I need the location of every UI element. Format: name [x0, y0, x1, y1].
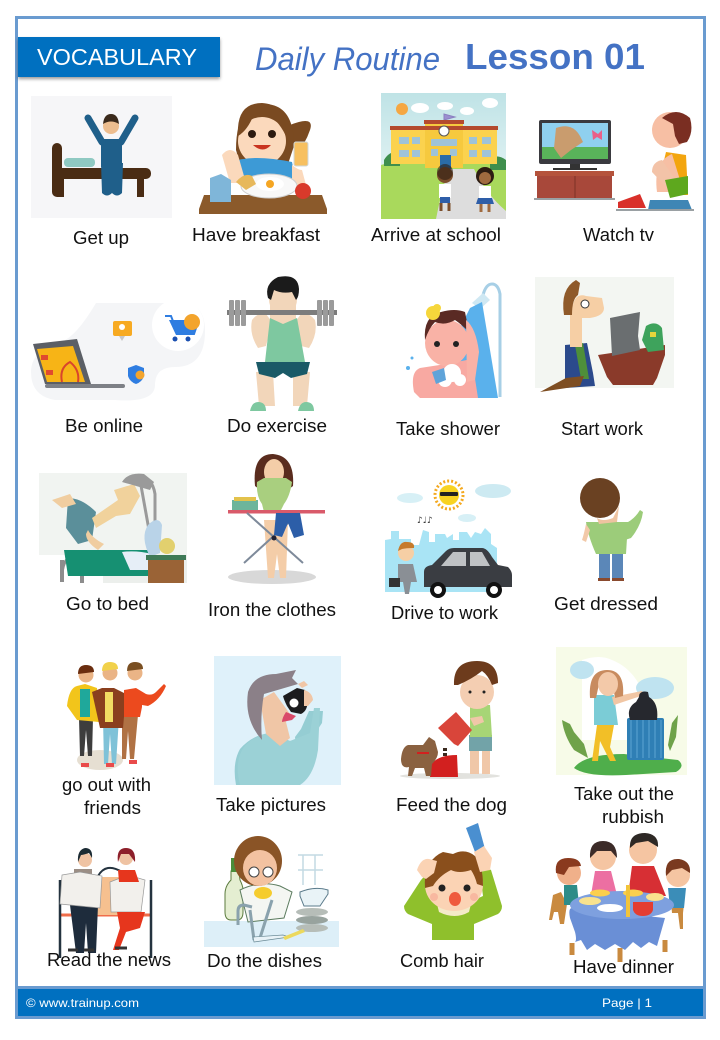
label: take out the rubbish: Take out the	[574, 784, 674, 804]
label: feed the dog: Feed the dog	[396, 795, 507, 815]
title: daily routine: Daily Routine	[255, 41, 440, 77]
card: take shower	[396, 284, 500, 439]
icon: woman ironing	[228, 454, 325, 584]
card: comb hair	[400, 823, 502, 971]
icon: boy putting on sweater	[580, 478, 643, 581]
icon: laptop and online shopping	[31, 299, 205, 400]
icon: man washing dishes	[204, 836, 339, 947]
icon: man and car in the city: ♪♩♪	[417, 516, 433, 526]
label: get dressed: Get dressed	[554, 594, 658, 614]
label: have breakfast: Have breakfast	[192, 225, 320, 245]
label: go out with friends: go out with	[62, 775, 151, 795]
card: get up	[31, 96, 172, 248]
label: iron the clothes: Iron the clothes	[208, 600, 336, 620]
label: take out the rubbish	[574, 784, 674, 827]
card: read the news	[47, 848, 171, 970]
card: feed the dog	[396, 661, 507, 815]
vocabulary banner	[18, 37, 220, 77]
card: be online	[31, 299, 205, 436]
card: start work	[535, 277, 674, 439]
card: iron the clothes	[208, 454, 336, 620]
icon: three friends	[67, 662, 166, 770]
label: do the dishes: Do the dishes	[207, 951, 322, 971]
footer: page number: Page | 1	[602, 996, 652, 1010]
icon: man rising from bed	[31, 96, 172, 218]
card: do exercise	[227, 276, 337, 436]
card: drive to work	[385, 481, 512, 623]
label: do exercise: Do exercise	[227, 416, 327, 436]
card: go to bed	[39, 473, 187, 614]
icon: old man going to bed	[39, 473, 187, 591]
icon: man lifting barbell	[227, 276, 337, 411]
card: get dressed	[554, 478, 658, 614]
label: go out with friends: friends	[84, 798, 141, 818]
label: watch tv: Watch tv	[583, 225, 654, 245]
label: have dinner: Have dinner	[573, 957, 674, 977]
icon: child in shower	[406, 284, 500, 398]
vocabulary banner: VOCABULARY	[37, 44, 197, 70]
footer bar	[18, 986, 703, 1016]
card: have dinner	[549, 833, 690, 977]
icon: school and children	[381, 93, 506, 219]
label: go out with friends	[62, 775, 151, 818]
label: be online: Be online	[65, 416, 143, 436]
card: take pictures	[214, 656, 341, 815]
label: take out the rubbish: rubbish	[602, 807, 664, 827]
label: take shower: Take shower	[396, 419, 500, 439]
card: arrive at school	[371, 93, 506, 245]
icon: boy feeding dog	[400, 661, 500, 779]
card: go out with friends	[62, 662, 166, 818]
label: comb hair: Comb hair	[400, 951, 484, 971]
label: get up: Get up	[73, 228, 129, 248]
icon: boy watching television	[534, 112, 694, 211]
card: have breakfast	[192, 103, 327, 245]
card: take out the rubbish	[556, 647, 687, 827]
label: read the news: Read the news	[47, 950, 171, 970]
title: lesson number: Lesson 01	[465, 36, 645, 77]
icon: man at office desk	[535, 277, 674, 392]
icon: couple reading newspapers on bench	[60, 848, 151, 958]
icon: girl eating breakfast	[199, 103, 327, 214]
icon: girl with rubbish bin	[556, 647, 687, 775]
footer: website: © www.trainup.com	[26, 996, 139, 1010]
icon: man and car in the city	[385, 481, 512, 598]
label: go to bed: Go to bed	[66, 594, 149, 614]
card: watch tv	[534, 112, 694, 245]
icon: family eating dinner	[549, 833, 690, 962]
label: drive to work: Drive to work	[391, 603, 499, 623]
label: take pictures: Take pictures	[216, 795, 326, 815]
label: start work: Start work	[561, 419, 644, 439]
card: do the dishes	[204, 836, 339, 971]
icon: boy combing hair	[404, 823, 502, 940]
label: arrive at school: Arrive at school	[371, 225, 501, 245]
icon: man with camera	[214, 656, 341, 785]
